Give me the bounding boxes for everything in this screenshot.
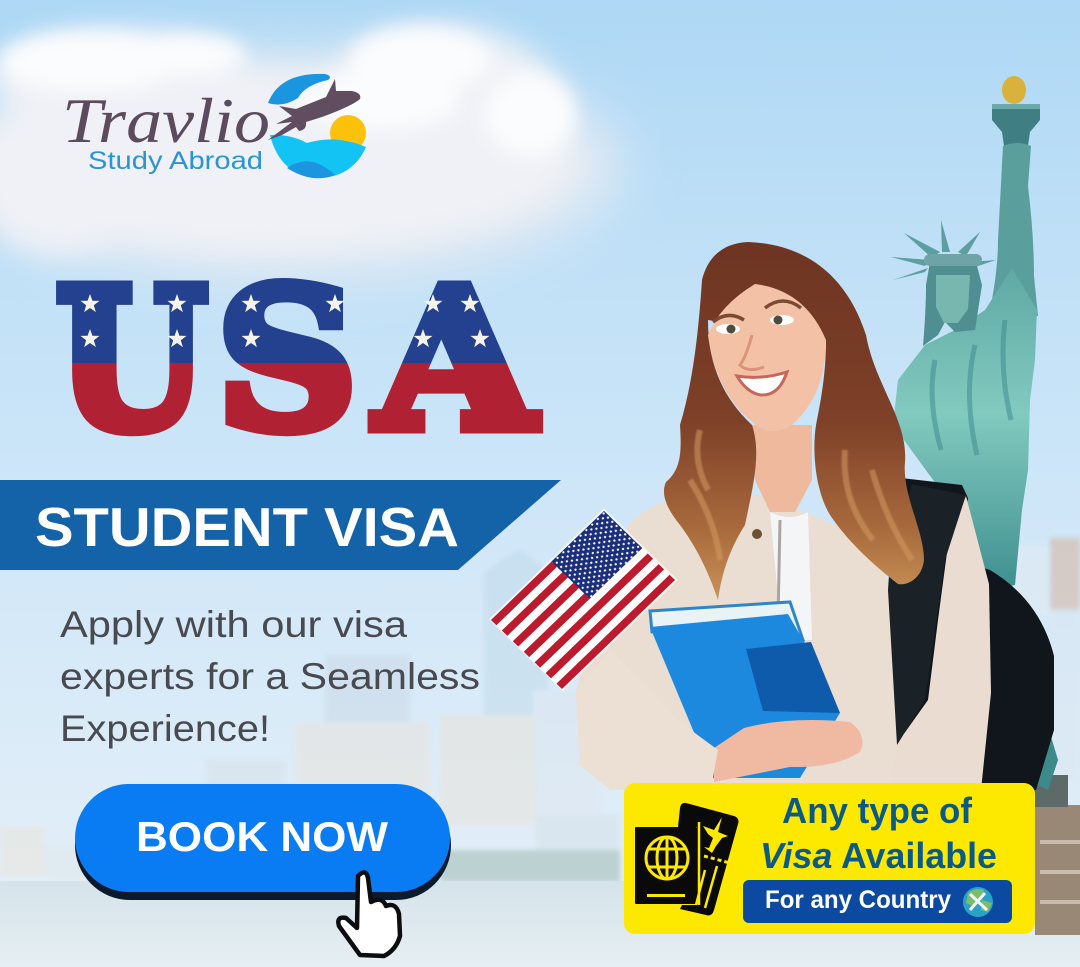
text block: tagline: experts for a Seamless [60,656,480,697]
logo emblem [268,74,366,178]
backpack [885,478,1054,790]
sleeve [576,650,718,790]
nose [740,335,764,370]
hair [664,242,924,600]
title stars [80,294,490,347]
eyes [716,324,740,334]
raised arm [990,143,1038,316]
icon: passport and ticket [635,803,738,915]
text block: tagline: Experience! [60,708,270,749]
banner: student visa: STUDENT VISA [35,496,459,558]
blue folder [650,614,840,778]
button: book now [75,784,451,900]
title: USA [56,248,537,473]
text block: tagline [60,604,480,749]
background: faded city skyline [0,538,1080,882]
notebook [650,602,803,640]
backpack strap [888,484,966,745]
logo tagline: Study Abroad [88,147,263,175]
pill: for any country: For any Country [765,886,951,914]
panel: any type of visa [624,783,1035,934]
logo wordmark: Travlio [62,85,270,156]
torch [992,76,1040,146]
panel subheading: Visa Available [760,835,997,876]
background: clouds [0,25,620,275]
neck and t-shirt [752,425,812,640]
statue base [1032,775,1080,935]
icon: globe with plane [963,887,993,917]
crown rays [891,220,996,280]
american flag [489,508,678,691]
panel heading: Any type of [782,790,973,831]
hair highlights [690,430,912,560]
face [708,284,826,431]
text block: tagline: Apply with our visa [60,604,407,645]
banner: student visa [0,480,561,570]
button: book now: BOOK NOW [136,813,388,860]
title: USA: A [374,248,537,473]
background: water [0,881,1080,967]
jacket right side [892,496,991,790]
statue of liberty [891,76,1080,935]
plane [268,79,360,140]
pill: for any country [743,880,1012,923]
passport in hand [746,642,840,713]
smile [737,372,787,395]
logo [62,74,366,178]
woman with backpack and books [576,242,1054,790]
jacket [576,495,905,790]
title: USA: U [56,248,207,473]
icon: hand cursor [338,872,400,956]
head [923,254,982,346]
title: USA: S [217,248,357,473]
robe [893,268,1037,590]
hand [714,720,862,782]
